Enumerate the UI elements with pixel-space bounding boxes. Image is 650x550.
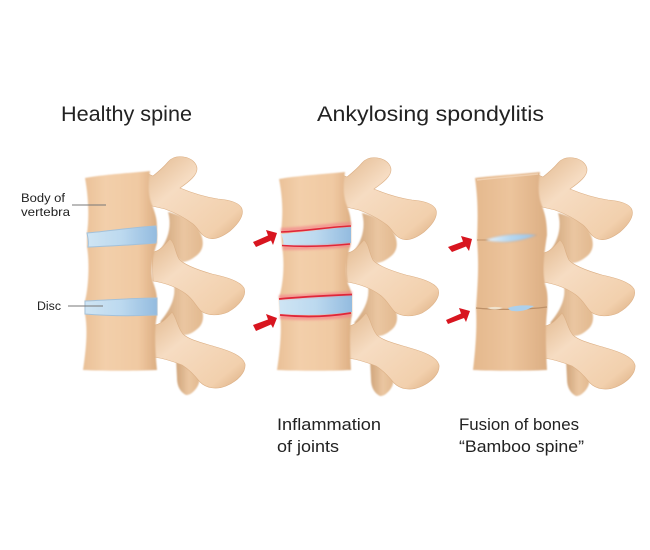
processes <box>536 158 635 396</box>
caption: inflammation of joints: of joints <box>277 437 339 456</box>
heading: ankylosing spondylitis: Ankylosing spondylitis <box>317 103 544 126</box>
lower joint line <box>476 307 547 309</box>
arrow upper <box>448 236 472 252</box>
arrow lower <box>253 314 277 331</box>
caption: inflammation of joints: Inflammation <box>277 415 381 434</box>
fused top edge highlight <box>477 174 538 180</box>
caption: fusion of bones: “Bamboo spine” <box>459 437 584 456</box>
inflamed lower disc <box>279 295 352 315</box>
processes <box>146 157 245 395</box>
upper disc <box>87 226 157 247</box>
leader line: disc <box>68 305 103 307</box>
leader line: body <box>72 204 106 206</box>
lower inflammation lines <box>279 294 352 316</box>
vertebra column <box>277 172 352 371</box>
label: body of vertebra: Body of <box>21 191 66 205</box>
lower remaining disc <box>508 305 534 311</box>
arrow lower <box>446 308 470 324</box>
heading: healthy spine: Healthy spine <box>61 103 192 126</box>
upper inflammation glow <box>281 224 351 248</box>
fused vertebra column <box>473 172 548 371</box>
upper joint line <box>477 239 490 241</box>
arrow upper <box>253 230 277 247</box>
illustration: fusion of bones <box>446 158 635 456</box>
label: vertebra: vertebra <box>21 205 70 219</box>
label: disc: Disc <box>37 299 61 313</box>
upper inflammation lines <box>281 226 351 246</box>
caption: fusion of bones: Fusion of bones <box>459 415 579 434</box>
lower disc <box>85 298 157 316</box>
lower disc small remnant <box>487 307 503 310</box>
inflamed upper disc <box>281 227 351 246</box>
lower inflammation glow <box>279 293 352 318</box>
vertebra column <box>83 171 157 371</box>
illustration: inflammation of joints <box>253 158 439 456</box>
illustration: healthy spine <box>21 157 245 395</box>
upper remaining disc <box>485 234 537 242</box>
processes <box>340 158 439 396</box>
